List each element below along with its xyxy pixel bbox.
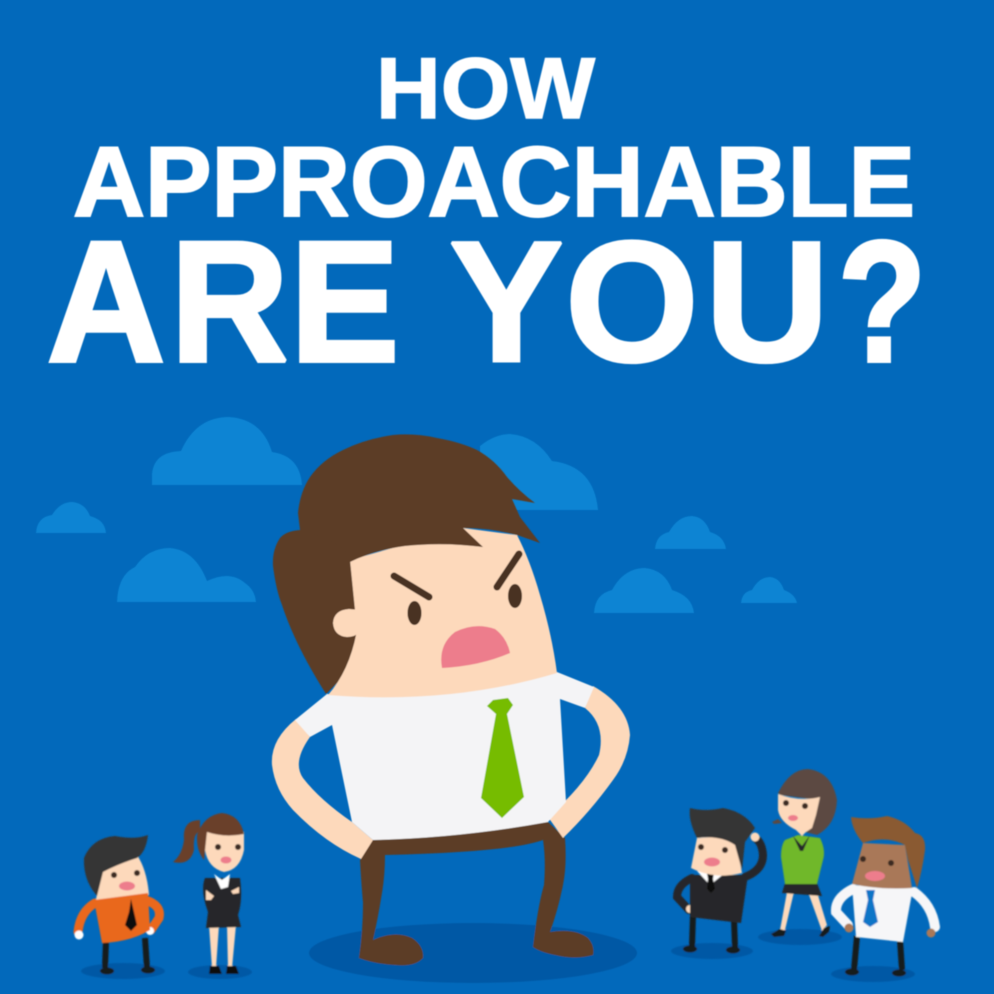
front hair bbox=[298, 434, 540, 562]
main character: angry boss bbox=[272, 434, 637, 983]
character: woman with ponytail bbox=[173, 813, 252, 979]
eyebrows bbox=[394, 554, 519, 597]
character: man in black suit scratching head bbox=[671, 808, 763, 959]
clouds bbox=[36, 417, 797, 613]
left arm bbox=[272, 719, 373, 859]
ground shadow bbox=[309, 923, 637, 983]
face bbox=[328, 528, 557, 697]
eyes bbox=[408, 584, 522, 625]
right arm bbox=[548, 686, 630, 838]
trousers and shoes bbox=[359, 821, 593, 965]
title: ? bbox=[838, 205, 926, 398]
back hair bbox=[273, 530, 360, 694]
necktie bbox=[481, 698, 524, 818]
character: man in orange shirt bbox=[74, 835, 165, 979]
title: ARE bbox=[47, 205, 399, 398]
title: APPROACHABLE bbox=[73, 126, 915, 237]
ear bbox=[333, 609, 360, 637]
shirt bbox=[295, 672, 594, 840]
title: HOW bbox=[376, 41, 596, 137]
open mouth bbox=[441, 626, 510, 668]
title: YOU bbox=[449, 206, 829, 398]
character: woman in green top bbox=[758, 769, 842, 945]
title bbox=[47, 41, 926, 398]
character: man in white shirt and blue tie bbox=[831, 816, 936, 982]
